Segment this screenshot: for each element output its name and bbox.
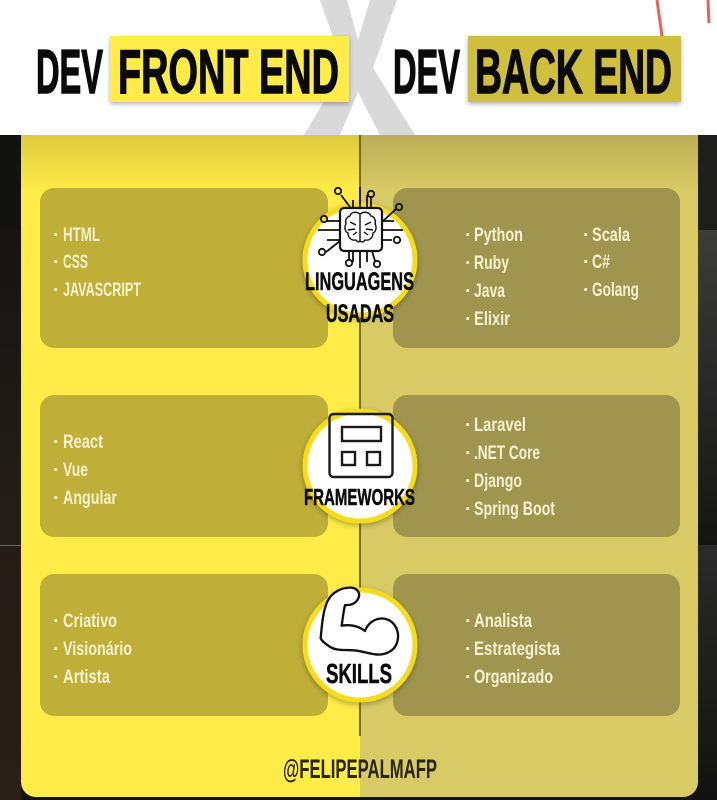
panel: back end frameworks: · — [465, 498, 472, 520]
panel: front end skills: Visionário — [63, 638, 132, 660]
badge: linguagens usadas — [305, 187, 415, 328]
heading: dev front end — [36, 36, 349, 107]
panel: back end skills — [393, 574, 680, 716]
panel: front end languages: · — [53, 224, 60, 246]
panel: back end frameworks: Laravel — [474, 414, 526, 436]
label: linguagens usadas: USADAS — [326, 300, 394, 328]
heading: dev front end: FRONT END — [118, 38, 339, 107]
panel: back end frameworks: Spring Boot — [474, 498, 555, 520]
panel: front end frameworks: Angular — [63, 487, 117, 509]
panel: front end frameworks — [40, 395, 328, 537]
panel: back end languages: Elixir — [474, 308, 510, 330]
badge: frameworks — [304, 411, 415, 521]
panel: back end frameworks: .NET Core — [474, 442, 540, 464]
panel: back end languages: Python — [474, 224, 523, 246]
panel: back end languages: · — [465, 280, 472, 302]
panel: back end languages: · — [465, 252, 472, 274]
panel: back end frameworks — [393, 395, 680, 537]
panel: back end skills: · — [465, 610, 472, 632]
panel: front end languages: · — [53, 251, 60, 273]
panel: back end skills: Estrategista — [474, 638, 560, 660]
large grey X — [304, 0, 415, 135]
panel: front end skills: Artista — [63, 666, 110, 688]
red scribble marks — [657, 0, 709, 54]
panel: back end languages: · — [465, 224, 472, 246]
panel: front end skills: Criativo — [63, 610, 117, 632]
footer handle: @FELIPEPALMAFP — [283, 754, 437, 784]
panel: back end languages: C# — [592, 251, 610, 273]
panel: back end frameworks: Django — [474, 470, 522, 492]
panel: back end skills: · — [465, 666, 472, 688]
label: linguagens usadas: LINGUAGENS — [305, 268, 414, 296]
icon: layout window — [330, 414, 392, 477]
panel: back end frameworks: · — [465, 442, 472, 464]
panel: back end languages: · — [583, 279, 590, 301]
panel: back end languages: · — [465, 308, 472, 330]
panel: front end languages: · — [53, 279, 60, 301]
panel: front end frameworks: Vue — [63, 459, 88, 481]
panel: front end languages: CSS — [63, 251, 88, 273]
icon: brain chip — [318, 187, 403, 268]
panel: back end frameworks: · — [465, 414, 472, 436]
panel: front end frameworks: · — [53, 459, 60, 481]
header band — [0, 0, 717, 135]
heading: dev back end — [393, 36, 681, 107]
icon: flexed arm — [321, 588, 398, 655]
label: skills: SKILLS — [326, 658, 392, 689]
panel: back end languages: Ruby — [474, 252, 509, 274]
panel: front end frameworks: · — [53, 487, 60, 509]
panel: back end languages: · — [583, 251, 590, 273]
panel: back end languages: Java — [474, 280, 505, 302]
panel: front end skills: · — [53, 666, 60, 688]
panel: back end languages: Scala — [592, 224, 630, 246]
panel: front end languages: JAVASCRIPT — [63, 279, 141, 301]
center divider line — [359, 135, 361, 736]
badge: skills — [305, 588, 415, 700]
panel: front end skills: · — [53, 638, 60, 660]
label: linguagens usadas — [305, 268, 414, 328]
panel: back end languages: · — [583, 224, 590, 246]
panel: back end skills: Analista — [474, 610, 532, 632]
panel: back end languages: Golang — [592, 279, 639, 301]
panel: front end languages: HTML — [63, 224, 100, 246]
panel: front end frameworks: · — [53, 431, 60, 453]
panel: front end skills — [40, 574, 328, 716]
panel: front end skills: · — [53, 610, 60, 632]
panel: front end languages — [40, 188, 328, 348]
heading: dev back end: DEV — [393, 38, 460, 107]
panel: back end languages — [393, 188, 680, 348]
heading: dev front end: DEV — [36, 38, 103, 107]
panel: back end frameworks: · — [465, 470, 472, 492]
label: frameworks: FRAMEWORKS — [304, 484, 415, 510]
panel: back end skills: Organizado — [474, 666, 553, 688]
panel: back end skills: · — [465, 638, 472, 660]
panel: front end frameworks: React — [63, 431, 103, 453]
